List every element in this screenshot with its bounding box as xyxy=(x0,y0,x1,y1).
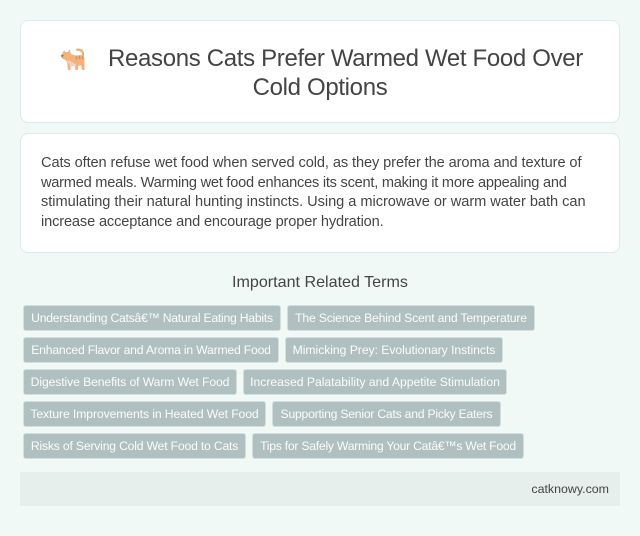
panel: title card xyxy=(20,20,620,123)
tag: Supporting Senior Cats and Picky Eaters xyxy=(281,407,492,421)
tag xyxy=(287,305,535,331)
tag xyxy=(23,305,281,331)
tag xyxy=(23,369,237,395)
footer bar xyxy=(20,472,620,506)
tag: Tips for Safely Warming Your Catâ€™s Wet Food xyxy=(260,439,516,453)
intro paragraph: warmed meals. Warming wet food enhances its scent, making it more appealing and xyxy=(41,174,567,190)
intro paragraph xyxy=(41,155,586,230)
title xyxy=(108,45,583,101)
tag: The Science Behind Scent and Temperature xyxy=(295,311,527,325)
tag xyxy=(23,433,246,459)
tag xyxy=(285,337,503,363)
title: Reasons Cats Prefer Warmed Wet Food Over xyxy=(108,45,583,72)
tag: Mimicking Prey: Evolutionary Instincts xyxy=(293,343,495,357)
tag: Enhanced Flavor and Aroma in Warmed Food xyxy=(31,343,271,357)
tag: Increased Palatability and Appetite Stimulation xyxy=(250,375,500,389)
intro paragraph: increase acceptance and encourage proper hydration. xyxy=(41,214,384,230)
tag: Texture Improvements in Heated Wet Food xyxy=(30,407,259,421)
panel: intro text card xyxy=(20,133,620,253)
title: Cold Options xyxy=(253,74,387,101)
tag xyxy=(272,401,501,427)
tag xyxy=(252,433,524,459)
tag xyxy=(23,401,266,427)
footer source text: catknowy.com xyxy=(531,482,609,496)
tag: Digestive Benefits of Warm Wet Food xyxy=(31,375,229,389)
icon: cat xyxy=(61,48,84,70)
intro paragraph: stimulating their natural hunting instincts. Using a microwave or warm water bath can xyxy=(41,194,586,210)
intro paragraph: Cats often refuse wet food when served cold, as they prefer the aroma and texture of xyxy=(41,155,581,171)
related terms tags xyxy=(23,305,535,459)
tag: Understanding Catsâ€™ Natural Eating Habits xyxy=(31,311,273,325)
tag xyxy=(23,337,279,363)
tag: Risks of Serving Cold Wet Food to Cats xyxy=(31,439,238,453)
tag xyxy=(243,369,507,395)
heading: related terms: Important Related Terms xyxy=(232,273,408,291)
